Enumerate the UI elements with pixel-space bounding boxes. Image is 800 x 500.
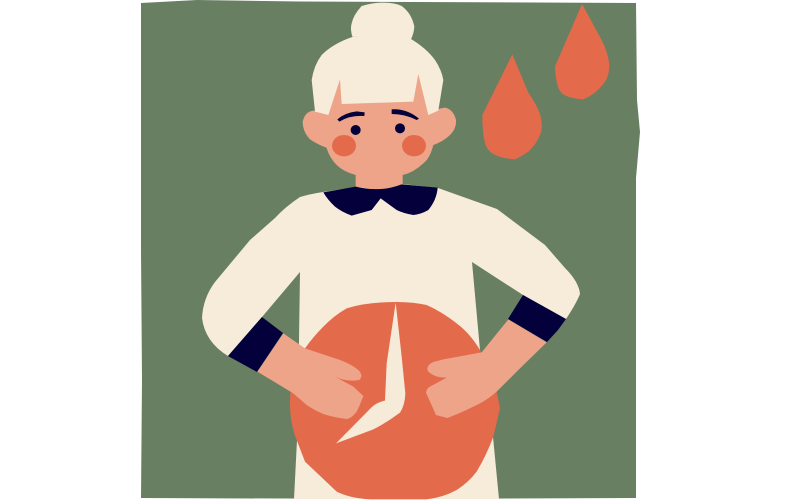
hair bbox=[312, 37, 443, 115]
right eye bbox=[395, 123, 405, 133]
icon: small blood drop bbox=[555, 4, 609, 99]
left eyebrow bbox=[337, 111, 365, 122]
neck and face bbox=[325, 67, 433, 191]
left ear bbox=[303, 111, 328, 148]
right ear bbox=[427, 108, 456, 146]
icon: large blood drop bbox=[482, 54, 542, 159]
head bbox=[303, 3, 456, 216]
left hand bbox=[257, 333, 363, 419]
pain crack bbox=[336, 303, 405, 443]
left eye bbox=[351, 125, 361, 135]
panel: green paper-cut background bbox=[141, 0, 640, 499]
left sleeve cuff bbox=[228, 317, 283, 372]
right sleeve cuff bbox=[508, 295, 566, 342]
right hand bbox=[426, 319, 547, 418]
belly with pain crack bbox=[257, 302, 547, 499]
sweater body bbox=[202, 184, 580, 499]
collar bbox=[323, 184, 438, 216]
belly circle bbox=[290, 302, 500, 499]
left cheek bbox=[332, 135, 356, 156]
right cheek bbox=[402, 135, 426, 156]
right eyebrow bbox=[392, 109, 419, 120]
hair bun bbox=[351, 3, 414, 40]
